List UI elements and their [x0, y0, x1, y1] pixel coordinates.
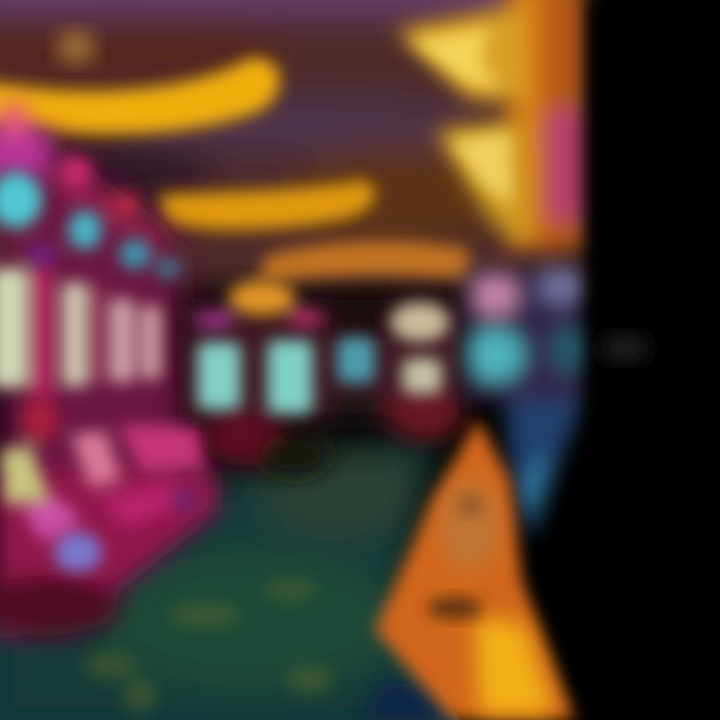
right aisle machines: [465, 267, 590, 540]
pillar dark mark: [427, 597, 483, 619]
third light strip: [260, 241, 470, 282]
floor pattern: [84, 580, 334, 713]
machine bases: [185, 300, 465, 477]
pillar small mark: [458, 495, 482, 515]
small ceiling lamp: [58, 31, 94, 63]
main yellow light: [0, 58, 280, 134]
bright geometric lights: [410, 28, 512, 205]
left slot machines: [0, 102, 215, 640]
second yellow light: [160, 180, 375, 230]
navy floor corner: [360, 680, 455, 720]
orange pillar: [375, 418, 575, 720]
base floor: [0, 600, 460, 720]
ceiling right column: [395, 0, 583, 250]
screens: [0, 156, 180, 400]
pillar highlight: [440, 479, 555, 715]
machine screens: [197, 337, 442, 414]
ceiling: [0, 0, 580, 290]
cabinets: [0, 140, 215, 630]
black side panel: [590, 0, 720, 720]
machine toppers: [195, 280, 450, 342]
lower panels: [0, 398, 208, 572]
ceiling lights: [0, 31, 470, 282]
center slot machines: [185, 280, 465, 477]
faint reflection on black: [601, 336, 649, 360]
floor: [0, 430, 450, 720]
